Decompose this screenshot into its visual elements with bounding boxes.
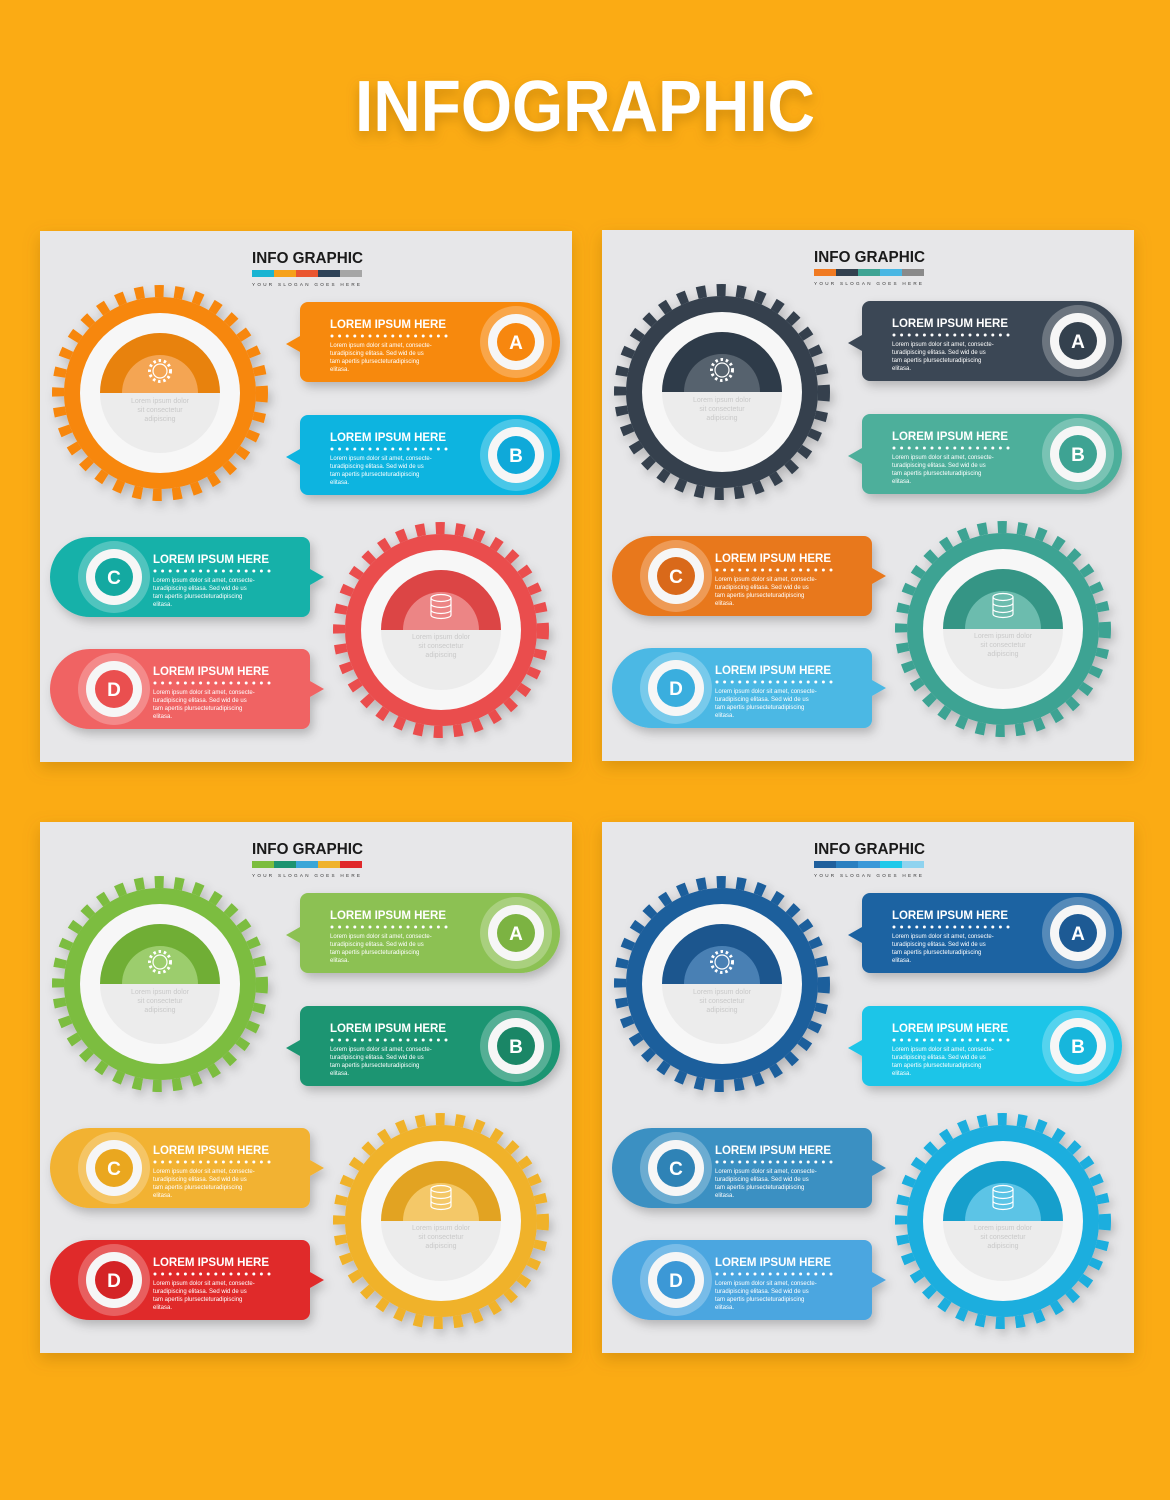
card C: tam apertis plursecteturadipiscing bbox=[715, 1185, 804, 1191]
card C: turadipiscing elitasa. Sed wid de us bbox=[715, 585, 809, 591]
header bbox=[814, 841, 925, 878]
card B: Lorem ipsum dolor sit amet, consecte- bbox=[330, 456, 432, 462]
gear 2 bbox=[339, 528, 543, 732]
card A: Lorem ipsum dolor sit amet, consecte- bbox=[330, 934, 432, 940]
gear 2: Lorem ipsum dolor bbox=[412, 1225, 471, 1232]
card C: Lorem ipsum dolor sit amet, consecte- bbox=[153, 578, 255, 584]
header: YOUR SLOGAN GOES HERE bbox=[252, 282, 360, 287]
card C: Lorem ipsum dolor sit amet, consecte- bbox=[715, 1169, 817, 1175]
card A: tam apertis plursecteturadipiscing bbox=[330, 359, 419, 365]
gear 2 bbox=[901, 527, 1105, 731]
header: YOUR SLOGAN GOES HERE bbox=[814, 281, 922, 286]
header: YOUR SLOGAN GOES HERE bbox=[252, 873, 360, 878]
card D: elitasa. bbox=[715, 1305, 734, 1311]
title: INFOGRAPHIC bbox=[355, 67, 815, 147]
header: YOUR SLOGAN GOES HERE bbox=[814, 873, 922, 878]
icon: database bbox=[431, 1186, 451, 1210]
header bbox=[252, 841, 363, 878]
gear 2: sit consectetur bbox=[418, 643, 464, 650]
card A: tam apertis plursecteturadipiscing bbox=[330, 950, 419, 956]
card C bbox=[612, 536, 886, 616]
gear 1: sit consectetur bbox=[699, 998, 745, 1005]
icon: gear bbox=[150, 360, 170, 382]
gear 2: sit consectetur bbox=[980, 642, 1026, 649]
gear 1: sit consectetur bbox=[699, 406, 745, 413]
card A: A bbox=[509, 924, 523, 945]
card D: turadipiscing elitasa. Sed wid de us bbox=[153, 698, 247, 704]
gear 1 bbox=[620, 290, 824, 494]
card A bbox=[848, 301, 1122, 381]
header bbox=[252, 250, 363, 287]
card D: elitasa. bbox=[153, 1305, 172, 1311]
card C: C bbox=[107, 1159, 121, 1180]
card A bbox=[286, 302, 560, 382]
icon: database bbox=[993, 594, 1013, 618]
header: INFO GRAPHIC bbox=[252, 841, 363, 858]
header bbox=[814, 249, 925, 286]
header: INFO GRAPHIC bbox=[814, 249, 925, 266]
card C bbox=[50, 1128, 324, 1208]
card A: Lorem ipsum dolor sit amet, consecte- bbox=[330, 343, 432, 349]
card C bbox=[612, 1128, 886, 1208]
gear 1: adipiscing bbox=[144, 416, 176, 423]
card D: elitasa. bbox=[715, 713, 734, 719]
icon: gear bbox=[712, 360, 732, 380]
card D: turadipiscing elitasa. Sed wid de us bbox=[715, 697, 809, 703]
card A: A bbox=[1071, 332, 1085, 353]
gear 1 bbox=[620, 882, 824, 1086]
card C: turadipiscing elitasa. Sed wid de us bbox=[153, 1177, 247, 1183]
card C: turadipiscing elitasa. Sed wid de us bbox=[715, 1177, 809, 1183]
card C: Lorem ipsum dolor sit amet, consecte- bbox=[153, 1169, 255, 1175]
card D: Lorem ipsum dolor sit amet, consecte- bbox=[153, 1281, 255, 1287]
header: INFO GRAPHIC bbox=[252, 250, 363, 267]
card A: A bbox=[509, 333, 523, 354]
gear 1: sit consectetur bbox=[137, 407, 183, 414]
card B: LOREM IPSUM HERE bbox=[892, 431, 1008, 443]
gear 1: adipiscing bbox=[706, 1007, 738, 1014]
card D: turadipiscing elitasa. Sed wid de us bbox=[715, 1289, 809, 1295]
card C: LOREM IPSUM HERE bbox=[153, 554, 269, 566]
header: INFO GRAPHIC bbox=[814, 841, 925, 858]
card B: B bbox=[509, 1037, 523, 1058]
card A: tam apertis plursecteturadipiscing bbox=[892, 358, 981, 364]
card C: tam apertis plursecteturadipiscing bbox=[153, 594, 242, 600]
gear 1: Lorem ipsum dolor bbox=[131, 989, 190, 996]
card D: tam apertis plursecteturadipiscing bbox=[153, 1297, 242, 1303]
card B: tam apertis plursecteturadipiscing bbox=[892, 471, 981, 477]
card D: turadipiscing elitasa. Sed wid de us bbox=[153, 1289, 247, 1295]
card B: turadipiscing elitasa. Sed wid de us bbox=[892, 1055, 986, 1061]
gear 2: sit consectetur bbox=[418, 1234, 464, 1241]
card C: tam apertis plursecteturadipiscing bbox=[153, 1185, 242, 1191]
icon: database bbox=[993, 1186, 1013, 1210]
card B: LOREM IPSUM HERE bbox=[892, 1023, 1008, 1035]
card D bbox=[612, 648, 886, 728]
gear 1: Lorem ipsum dolor bbox=[131, 398, 190, 405]
card D: D bbox=[107, 680, 121, 701]
icon: gear bbox=[712, 952, 732, 972]
card B: B bbox=[1071, 445, 1085, 466]
card B: LOREM IPSUM HERE bbox=[330, 432, 446, 444]
card C: C bbox=[669, 1159, 683, 1180]
card A: elitasa. bbox=[330, 958, 349, 964]
panel: dark navy/teal version bbox=[602, 230, 1134, 761]
card B bbox=[848, 414, 1122, 494]
card C: Lorem ipsum dolor sit amet, consecte- bbox=[715, 577, 817, 583]
card D: D bbox=[669, 1271, 683, 1292]
gear 2 bbox=[339, 1119, 543, 1323]
card C: LOREM IPSUM HERE bbox=[153, 1145, 269, 1157]
card A bbox=[848, 893, 1122, 973]
card D: elitasa. bbox=[153, 714, 172, 720]
card A: LOREM IPSUM HERE bbox=[330, 319, 446, 331]
card C: tam apertis plursecteturadipiscing bbox=[715, 593, 804, 599]
card B: tam apertis plursecteturadipiscing bbox=[330, 1063, 419, 1069]
card B: tam apertis plursecteturadipiscing bbox=[330, 472, 419, 478]
card C: elitasa. bbox=[715, 601, 734, 607]
gear 2: adipiscing bbox=[987, 651, 1019, 658]
gear 2: adipiscing bbox=[425, 1243, 457, 1250]
card A: LOREM IPSUM HERE bbox=[330, 910, 446, 922]
card C: C bbox=[107, 568, 121, 589]
card D: tam apertis plursecteturadipiscing bbox=[715, 1297, 804, 1303]
card B: elitasa. bbox=[330, 480, 349, 486]
card B: LOREM IPSUM HERE bbox=[330, 1023, 446, 1035]
card A: A bbox=[1071, 924, 1085, 945]
card A: turadipiscing elitasa. Sed wid de us bbox=[330, 942, 424, 948]
card A: turadipiscing elitasa. Sed wid de us bbox=[892, 350, 986, 356]
card C: C bbox=[669, 567, 683, 588]
card C: LOREM IPSUM HERE bbox=[715, 1145, 831, 1157]
card A: elitasa. bbox=[892, 366, 911, 372]
card B: elitasa. bbox=[892, 479, 911, 485]
card A: turadipiscing elitasa. Sed wid de us bbox=[330, 351, 424, 357]
card D bbox=[50, 1240, 324, 1320]
gear 2: adipiscing bbox=[425, 652, 457, 659]
gear 1 bbox=[58, 291, 262, 495]
card A: LOREM IPSUM HERE bbox=[892, 318, 1008, 330]
card D: LOREM IPSUM HERE bbox=[715, 1257, 831, 1269]
gear 1: adipiscing bbox=[706, 415, 738, 422]
gear 1: Lorem ipsum dolor bbox=[693, 989, 752, 996]
gear 1 bbox=[58, 882, 262, 1086]
card D: D bbox=[669, 679, 683, 700]
card B bbox=[286, 415, 560, 495]
card B: elitasa. bbox=[330, 1071, 349, 1077]
gear 2: Lorem ipsum dolor bbox=[974, 633, 1033, 640]
gear 1: adipiscing bbox=[144, 1007, 176, 1014]
card B: Lorem ipsum dolor sit amet, consecte- bbox=[892, 1047, 994, 1053]
card B: turadipiscing elitasa. Sed wid de us bbox=[330, 464, 424, 470]
card B: Lorem ipsum dolor sit amet, consecte- bbox=[892, 455, 994, 461]
card C: elitasa. bbox=[715, 1193, 734, 1199]
card D: LOREM IPSUM HERE bbox=[153, 666, 269, 678]
gear 2: adipiscing bbox=[987, 1243, 1019, 1250]
card A: Lorem ipsum dolor sit amet, consecte- bbox=[892, 342, 994, 348]
panel: green/yellow version bbox=[40, 822, 572, 1353]
gear 2: sit consectetur bbox=[980, 1234, 1026, 1241]
icon: database bbox=[431, 594, 451, 618]
card D bbox=[50, 649, 324, 729]
card C: LOREM IPSUM HERE bbox=[715, 553, 831, 565]
gear 1: sit consectetur bbox=[137, 998, 183, 1005]
card B: turadipiscing elitasa. Sed wid de us bbox=[330, 1055, 424, 1061]
card B bbox=[848, 1006, 1122, 1086]
card A: LOREM IPSUM HERE bbox=[892, 910, 1008, 922]
card B: turadipiscing elitasa. Sed wid de us bbox=[892, 463, 986, 469]
card B: B bbox=[1071, 1037, 1085, 1058]
card D: Lorem ipsum dolor sit amet, consecte- bbox=[715, 689, 817, 695]
card A bbox=[286, 893, 560, 973]
card D: LOREM IPSUM HERE bbox=[153, 1257, 269, 1269]
card B bbox=[286, 1006, 560, 1086]
card A: elitasa. bbox=[330, 367, 349, 373]
card A: Lorem ipsum dolor sit amet, consecte- bbox=[892, 934, 994, 940]
card C: turadipiscing elitasa. Sed wid de us bbox=[153, 586, 247, 592]
panel: blue version bbox=[602, 822, 1134, 1353]
card D: Lorem ipsum dolor sit amet, consecte- bbox=[715, 1281, 817, 1287]
gear 2 bbox=[901, 1119, 1105, 1323]
card C bbox=[50, 537, 324, 617]
card C: elitasa. bbox=[153, 602, 172, 608]
card A: elitasa. bbox=[892, 958, 911, 964]
card D: Lorem ipsum dolor sit amet, consecte- bbox=[153, 690, 255, 696]
gear 2: Lorem ipsum dolor bbox=[974, 1225, 1033, 1232]
card D: tam apertis plursecteturadipiscing bbox=[153, 706, 242, 712]
gear 2: Lorem ipsum dolor bbox=[412, 634, 471, 641]
icon: gear bbox=[150, 952, 170, 972]
card D bbox=[612, 1240, 886, 1320]
card B: Lorem ipsum dolor sit amet, consecte- bbox=[330, 1047, 432, 1053]
panel: orange/cyan version bbox=[40, 231, 572, 762]
card D: D bbox=[107, 1271, 121, 1292]
card D: LOREM IPSUM HERE bbox=[715, 665, 831, 677]
card C: elitasa. bbox=[153, 1193, 172, 1199]
card D: tam apertis plursecteturadipiscing bbox=[715, 705, 804, 711]
card B: tam apertis plursecteturadipiscing bbox=[892, 1063, 981, 1069]
card B: elitasa. bbox=[892, 1071, 911, 1077]
gear 1: Lorem ipsum dolor bbox=[693, 397, 752, 404]
card A: tam apertis plursecteturadipiscing bbox=[892, 950, 981, 956]
card A: turadipiscing elitasa. Sed wid de us bbox=[892, 942, 986, 948]
card B: B bbox=[509, 446, 523, 467]
